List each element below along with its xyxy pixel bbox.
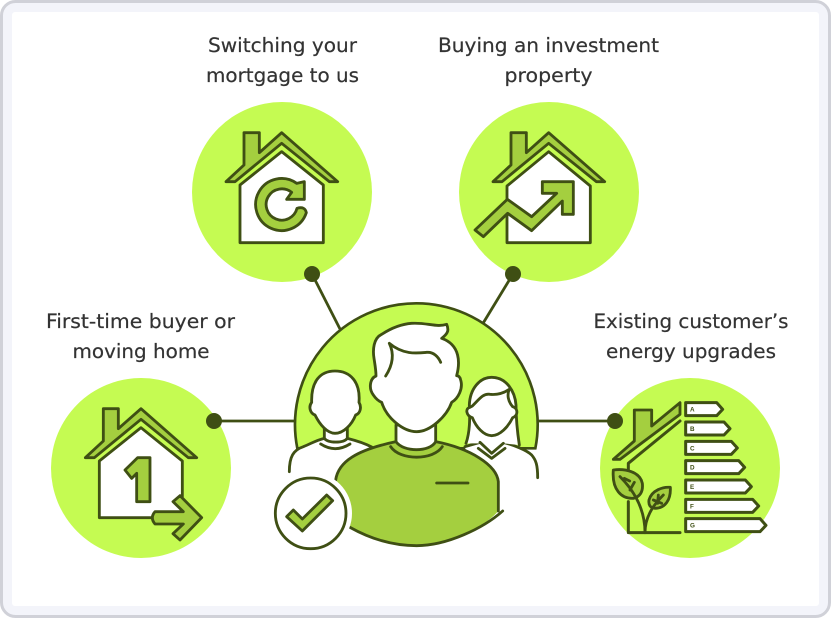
heading: first-time buyer: First-time buyer or	[46, 310, 236, 333]
energy rating bars	[686, 403, 766, 532]
heading: switching your mortgage: mortgage to us	[206, 64, 359, 87]
check badge	[269, 472, 352, 555]
heading: switching your mortgage: Switching your	[208, 34, 358, 57]
energy rating bars: C	[690, 445, 695, 452]
heading: buying an investment property: Buying an investment	[438, 34, 659, 57]
energy rating bars: A	[690, 407, 695, 414]
energy rating bars: F	[690, 503, 694, 510]
person left	[289, 371, 380, 475]
heading: energy upgrades: Existing customer’s	[594, 310, 788, 333]
person main body	[336, 425, 503, 546]
heading: buying an investment property: property	[504, 64, 592, 87]
person right	[465, 377, 538, 478]
central people illustration	[269, 303, 538, 555]
energy rating bars: B	[690, 426, 695, 433]
heading: buying an investment property	[438, 34, 659, 87]
plant with leaves	[613, 470, 670, 533]
heading: energy upgrades	[594, 310, 788, 363]
energy rating bars: E	[690, 484, 694, 491]
connector lines	[214, 274, 615, 421]
energy rating bars: D	[690, 465, 695, 472]
icon circle: switching mortgage	[192, 102, 372, 282]
heading: first-time buyer: moving home	[72, 340, 210, 363]
icon circle: energy upgrades	[600, 378, 780, 558]
icon circle: first-time buyer	[51, 378, 231, 558]
connector dots	[206, 266, 623, 429]
heading: first-time buyer	[46, 310, 236, 363]
background circle	[295, 303, 538, 448]
energy rating bars: G	[690, 523, 695, 530]
heading: switching your mortgage	[206, 34, 359, 87]
icon circle: investment property	[459, 102, 639, 282]
person main head	[370, 323, 461, 432]
heading: energy upgrades: energy upgrades	[606, 340, 776, 363]
